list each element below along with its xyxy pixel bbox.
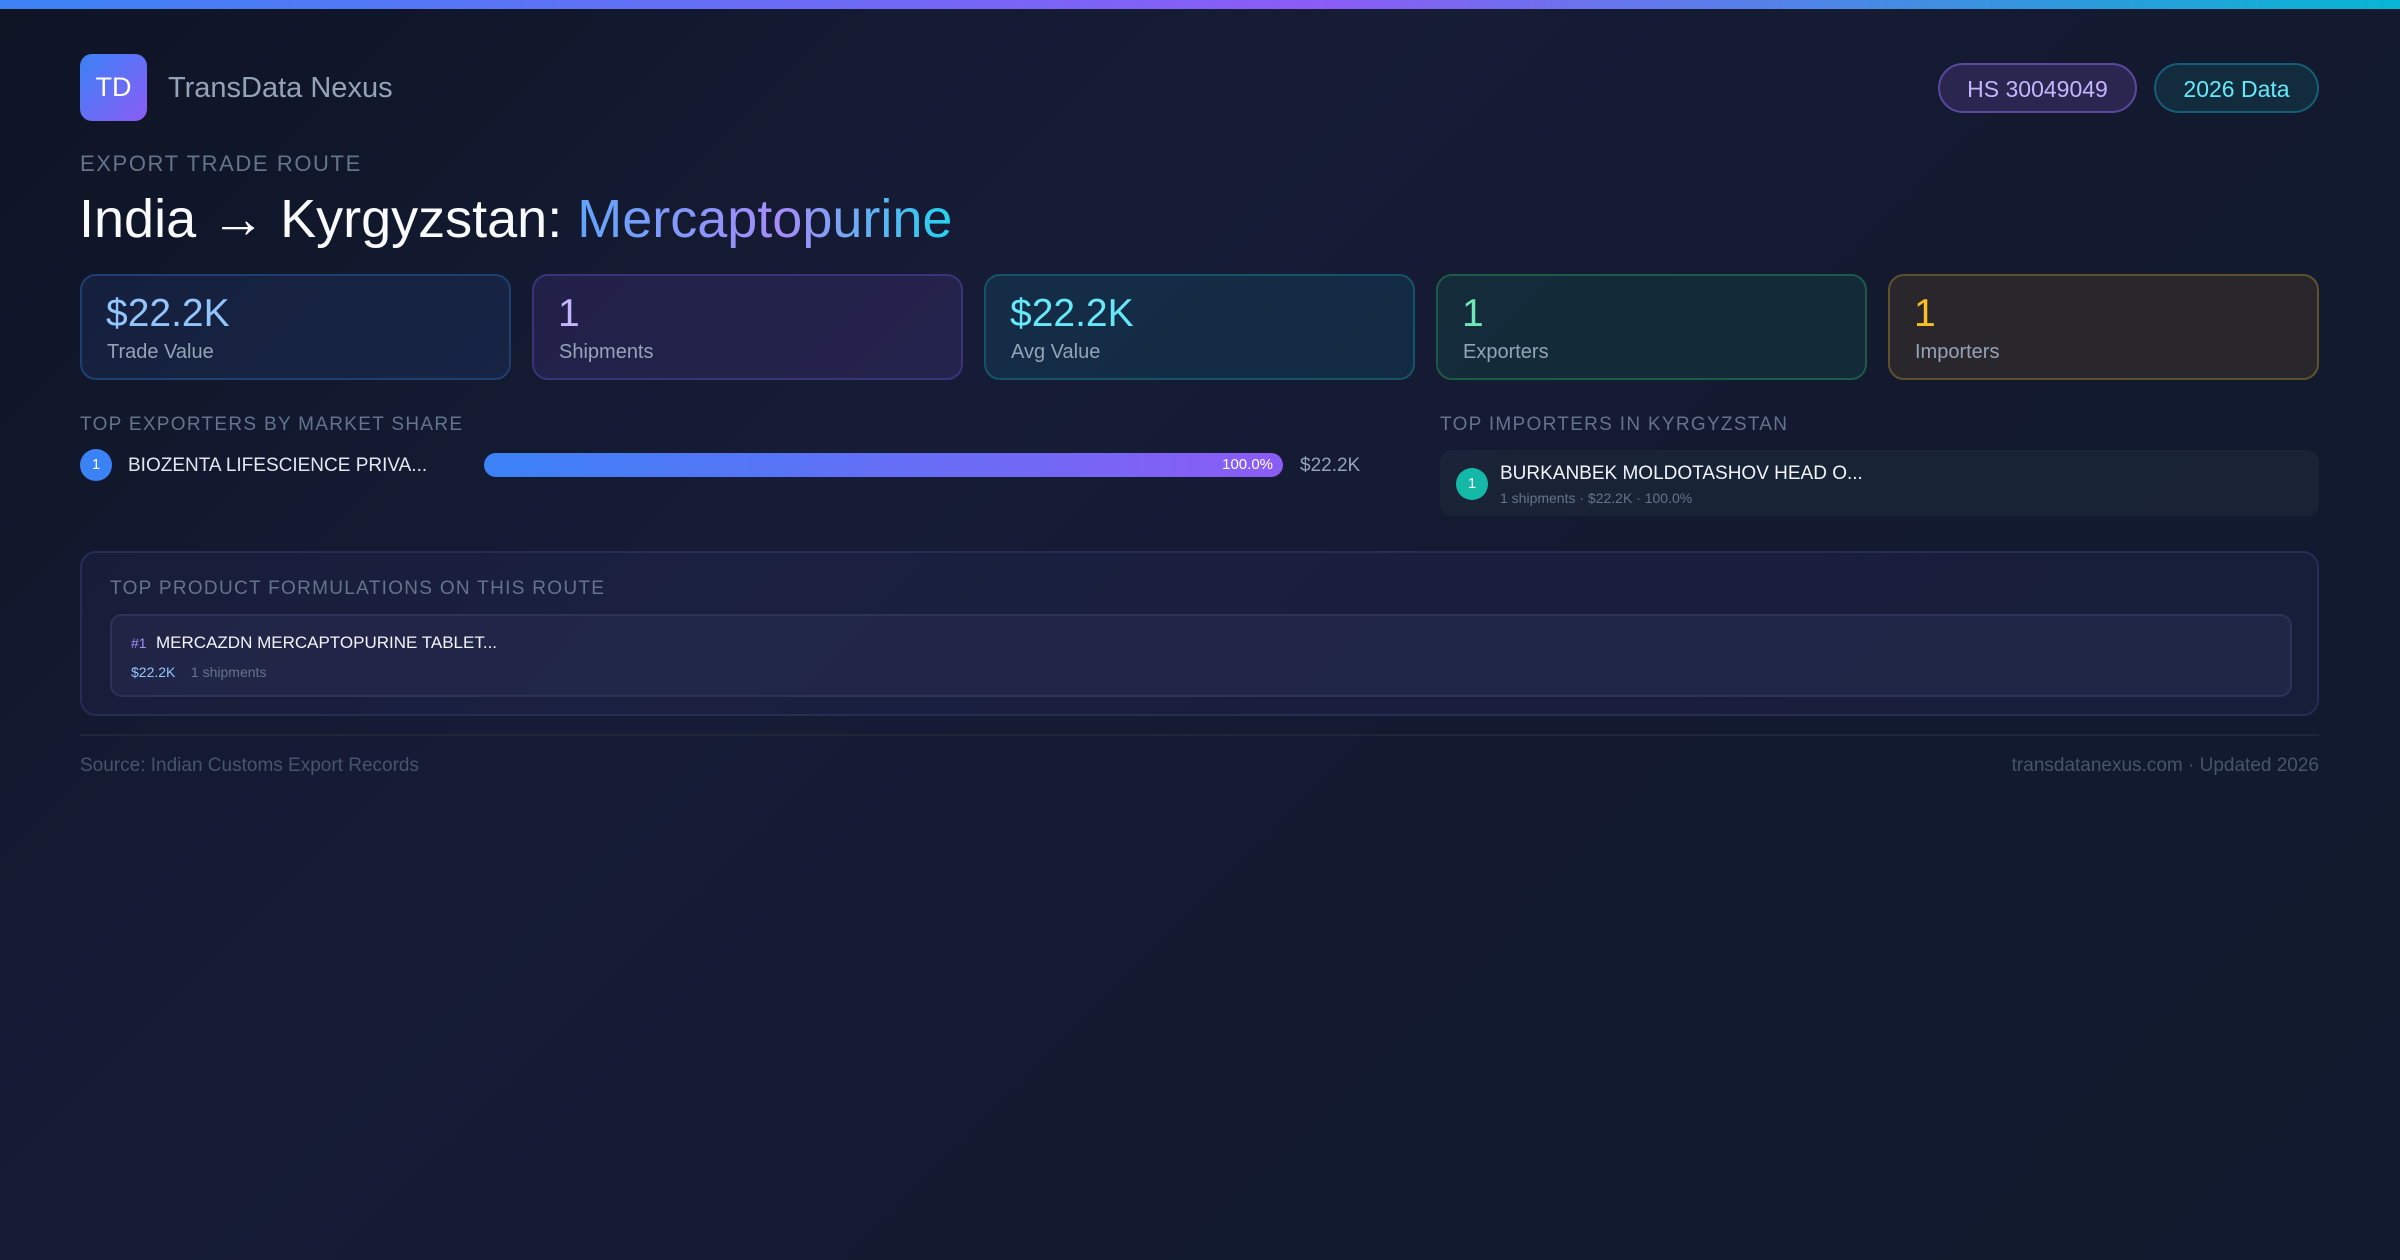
stat card: avg value: Avg Value (1011, 341, 1100, 363)
title: India → Kyrgyzstan: Mercaptopurine (79, 189, 952, 249)
stat card: exporters (1436, 274, 1867, 380)
importers heading: TOP IMPORTERS IN KYRGYZSTAN (1440, 414, 1788, 435)
importer card (1440, 450, 2319, 516)
rank circle: 1 (92, 456, 100, 473)
stat card: shipments (532, 274, 963, 380)
brand name: TransData Nexus (168, 72, 393, 104)
badge: year: 2026 Data (2183, 76, 2290, 102)
importer name: BURKANBEK MOLDOTASHOV HEAD O... (1500, 463, 1863, 484)
value: $22.2K (1300, 455, 1360, 476)
footer source: Source: Indian Customs Export Records (80, 755, 419, 776)
stat card: trade value: Trade Value (107, 341, 214, 363)
rank circle (1456, 468, 1488, 500)
stat card: avg value (984, 274, 1415, 380)
eyebrow: EXPORT TRADE ROUTE (80, 151, 362, 176)
stat card: trade value (80, 274, 511, 380)
stat card: importers (1888, 274, 2319, 380)
exporters heading: TOP EXPORTERS BY MARKET SHARE (80, 414, 463, 435)
formulation item (110, 614, 2292, 697)
exporter row (80, 449, 1360, 481)
stat card: importers: 1 (1914, 292, 1936, 335)
badge: HS code (1938, 63, 2137, 113)
stat card: shipments: Shipments (559, 341, 654, 363)
top gradient bar (0, 0, 2400, 9)
panel heading: TOP PRODUCT FORMULATIONS ON THIS ROUTE (110, 578, 605, 599)
rank circle (80, 449, 112, 481)
stat card: trade value: $22.2K (106, 292, 230, 335)
stat card: importers: Importers (1915, 341, 1999, 363)
exporter name: BIOZENTA LIFESCIENCE PRIVA... (128, 455, 427, 476)
stat card: avg value: $22.2K (1010, 292, 1134, 335)
share bar (484, 453, 1283, 477)
item meta: $22.2K 1 shipments (131, 664, 266, 680)
rank circle: 1 (1468, 475, 1476, 492)
panel: formulations (80, 551, 2319, 716)
item name: #1 MERCAZDN MERCAPTOPURINE TABLET... (131, 633, 497, 652)
share bar: 100.0% (1222, 456, 1273, 473)
stat card: exporters: Exporters (1463, 341, 1549, 363)
badge: year (2154, 63, 2319, 113)
logo: TD (96, 72, 132, 102)
logo (80, 54, 147, 121)
importer meta: 1 shipments · $22.2K · 100.0% (1500, 490, 1692, 506)
badge: HS code: HS 30049049 (1967, 76, 2108, 102)
stat card: exporters: 1 (1462, 292, 1484, 335)
footer site: transdatanexus.com · Updated 2026 (2012, 755, 2319, 776)
stat card: shipments: 1 (558, 292, 580, 335)
